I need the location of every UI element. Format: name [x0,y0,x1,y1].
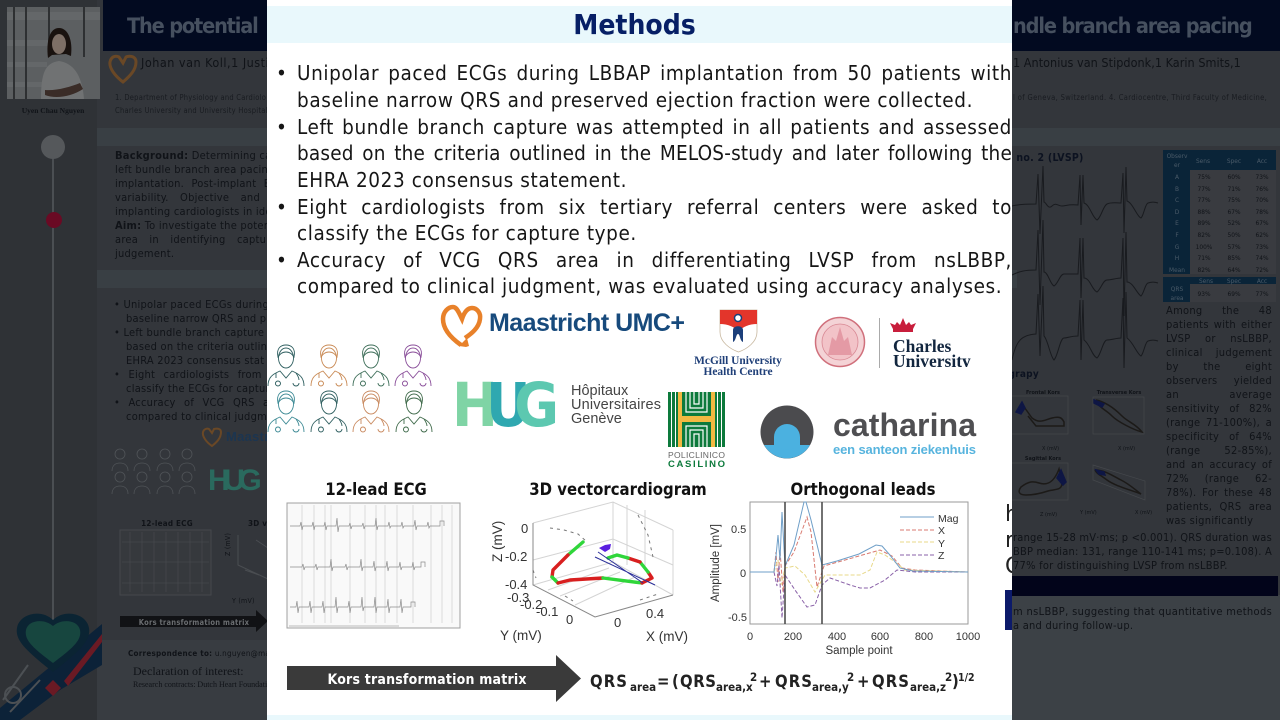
results text column: specificity of 64% [1166,430,1272,443]
formula: QRS area: area,x [716,680,753,694]
results table: 72% [1256,266,1269,274]
axis labels: -0.2 [520,597,542,612]
axis labels: 1000 [956,631,980,643]
axis labels: 0 [614,615,621,630]
results table: F [1175,231,1179,239]
logo: catharina: een santeon ziekenhuis [833,442,976,457]
logo: Policlinico Casilino: CASILINO [668,459,725,470]
results table: H [1175,254,1179,262]
results table: 70% [1256,196,1269,204]
vectorcardiography panel [1000,369,1152,518]
vector loop [552,542,652,583]
authors line: Johan van Koll,1 Justi [140,55,269,70]
vectorcardiography panel: Y (mV) [1079,510,1097,516]
formula: QRS area: 2 [750,670,757,684]
results text column: (range 52-85%), [1166,444,1272,457]
axis labels: -0.5 [728,612,747,624]
heading: Methods: Methods [573,8,696,41]
results lower lines: BBP median: 131, range 110-141 ms; p=0.108). A [1013,545,1272,558]
results text column: patients, QRS area [1166,500,1272,513]
results table: 77% [1256,290,1269,298]
dimmed logos and icons [112,429,269,497]
logo: McGill University Health Centre: Health Centre [703,366,773,378]
presenter photo [7,7,100,99]
axis labels: -0.2 [505,549,527,564]
axis labels: X (mV) [646,629,688,644]
vectorcardiography panel: grapy [1008,369,1039,380]
results text column: and an accuracy of [1166,458,1272,471]
logo: HUG: G [514,370,559,441]
dimmed methods bullets: • Unipolar paced ECGs during [114,298,269,311]
formula: QRS area: area,y [812,680,849,694]
axis labels: 0 [740,568,746,580]
background and aim text: area in identifying capture type [115,233,311,246]
axis labels: 400 [828,631,846,643]
formula: QRS area: ( [672,672,679,691]
presenter name: Uyen Chau Nguyen [22,106,85,115]
dimmed methods bullets: • Left bundle branch capture [114,326,264,339]
logo: catharina: catharina [833,407,976,443]
formula: QRS area: 1/2 [958,672,975,684]
results table: Acc [1257,157,1267,165]
bullet 3: classify the ECGs for capture type. [297,221,637,245]
axis labels: 800 [915,631,933,643]
heading: 12-lead ECG [325,480,427,499]
axis labels: -0.4 [505,577,527,592]
heading: Methods [267,6,1012,43]
bullet 1: Unipolar paced ECGs during LBBAP implantation from 50 patients with [297,61,1012,85]
results text column: by the eight [1166,360,1272,373]
vectorcardiography panel: X (mV) [1118,446,1135,452]
icon: cardiologist 3 [353,345,389,386]
background and aim text [114,149,336,260]
logo: Charles University: University [893,351,971,371]
results text column: 78%). For these 48 [1166,486,1272,499]
arrow: Kors transformation matrix: Kors transformation matrix [328,672,526,688]
axis labels: -0.3 [507,590,529,605]
formula: QRS area: QRS [680,672,716,691]
correspondence and declaration: Correspondence to: u.nguyen@maas [128,649,279,658]
logo: HUG [452,370,661,441]
axis labels [710,524,980,657]
formula: QRS area: area,z [910,680,946,694]
results table: 88% [1198,208,1211,216]
results text column: was significantly [1166,514,1253,527]
axis labels: 0 [747,631,753,643]
trace: Z [750,565,968,618]
results table: 67% [1256,219,1269,227]
results table: 57% [1228,243,1241,251]
illustrations and logos [268,304,980,702]
results table: 76% [1256,185,1269,193]
authors line: 1 Antonius van Stipdonk,1 Karin Smits,1 [1013,55,1241,70]
results table: area [1170,294,1184,302]
axis labels: -0.1 [536,604,558,619]
results table: 85% [1228,254,1241,262]
axis labels: Z (mV) [490,521,505,562]
background and aim text: judgement. [114,247,174,260]
results table: Observ [1167,152,1188,160]
results table: 78% [1256,208,1269,216]
results table: C [1175,196,1179,204]
background and aim text: implantation. Post-implant ECG [115,177,285,190]
icon: cardiologist 2 [311,345,347,386]
poster title banner: ndle branch area pacing [1013,14,1253,39]
logo: HUG: Hôpitaux [571,383,629,399]
results table: 60% [1228,173,1241,181]
results table: 77% [1198,185,1211,193]
formula: QRS area: 2 [847,670,854,684]
bullet 4: • [276,248,287,272]
results text column: sensitivity of 82% [1166,402,1272,415]
axis labels: Amplitude [mV] [710,524,722,602]
vectorcardiography panel: Transverse Kors [1097,390,1141,396]
bullet 2: EHRA 2023 consensus statement. [297,168,627,192]
dimmed methods bullets: • Accuracy of VCG QRS area [114,396,286,409]
bullet 3: • [276,195,287,219]
results table: G [1175,243,1180,251]
affiliations [115,93,1267,115]
dimmed ECG figures: 12-lead ECG [141,519,193,528]
bullet 3: Eight cardiologists from six tertiary referral centers were asked to [297,195,1012,219]
results table: 100% [1196,243,1213,251]
icon: cardiologist 8 [396,391,432,432]
background and aim text: left bundle branch area pacing [115,163,275,176]
bullet 2: • [276,115,287,139]
dimmed ECG figures: Z (mV) [224,533,232,556]
axis labels: 600 [871,631,889,643]
bullet 2: based on the criteria outlined in the MELOS-study and later following the [297,141,1012,165]
logo: catharina [760,406,976,458]
icon: cardiologist 7 [353,391,389,432]
dimmed logos and icons: HUG [208,464,262,497]
conclusion text [1013,605,1272,632]
vectorcardiography panel: X (mV) [1042,446,1059,452]
panel footer strip [267,715,1012,720]
formula: QRS area: 2 [945,670,952,684]
bullet 4: compared to clinical judgment, was evaluated using accuracy analyses. [297,274,1002,298]
results table: 50% [1228,231,1241,239]
results lower lines [1013,531,1272,572]
axis labels: 200 [784,631,802,643]
icon group: eight cardiologists [268,345,432,432]
background and aim text: Aim: To investigate the potential [115,219,287,232]
results table: QRS [1171,285,1183,293]
logo: McGill University Health Centre: McGill University [694,355,782,367]
ECG sheet [287,503,460,628]
results table: 73% [1256,243,1269,251]
formula: QRS area: ) [952,672,959,691]
results table: 62% [1256,231,1269,239]
dimmed ECG figures [120,519,281,605]
bullet 2 [276,115,1012,192]
vectorcardiography panel: Sagittal Kors [1025,456,1061,462]
results text column: Among the 48 [1166,304,1272,317]
results table: Spec [1227,277,1241,285]
dimmed methods bullets: classify the ECGs for captur [126,382,271,395]
results table: 93% [1198,290,1211,298]
results table: Sens [1199,277,1213,285]
dimmed methods bullets [114,298,286,423]
figure: 12-lead ECG [287,480,460,628]
vectorcardiography panel: Frontal Kors [1026,390,1060,396]
axis labels: 0 [566,612,573,627]
formula: QRS area: QRS [872,672,909,691]
logo: McGill University Health Centre [694,310,782,378]
results table: 71% [1228,185,1241,193]
dimmed ECG figures: Y (mV) [231,597,255,605]
arrow: Kors transformation matrix [287,655,581,702]
dimmed methods bullets: baseline narrow QRS and p [126,312,266,325]
trace: magnitude [750,502,968,572]
affiliations: Charles University and University Hospital [115,106,268,115]
legend: Mag [938,513,959,525]
results table: 74% [1256,254,1269,262]
icon: cardiologist 6 [311,391,347,432]
dimmed Kors arrow: Kors transformation matrix [139,618,250,627]
QRS boundary lines [785,502,822,624]
bullet 4 [276,248,1012,298]
panel: methods popup [267,0,1012,720]
results text column: (range 71-100%), a [1166,416,1272,429]
bullet 1: baseline narrow QRS and preserved ejection fraction were collected. [297,88,973,112]
background and aim text: Background: Determining capture [115,149,299,162]
formula: QRS area: QRS [590,672,627,691]
dimmed logos and icons: Maastr [226,429,269,444]
conference heart logo [0,614,102,720]
chart frame [750,502,968,624]
authors line [110,55,1241,82]
bullet 3 [276,195,1012,245]
clipped foreground lettering at right edge [1005,502,1012,630]
dimmed methods bullets: • Eight cardiologists from six [114,368,285,381]
axis labels [490,521,688,644]
results table: 82% [1198,266,1211,274]
ECG no. 2 panel: ECG no. 2 (LVSP) [991,152,1084,164]
results text column: LVSP or nsLBBP, [1166,332,1272,345]
results table: 82% [1198,231,1211,239]
dimmed methods bullets: EHRA 2023 consensus stat [126,354,264,367]
trace: X [750,517,968,592]
bullet 4: Accuracy of VCG QRS area in differentiating LVSP from nsLBBP, [297,248,1012,272]
conclusion text: a and during follow-up. [1013,619,1133,632]
poster title banner [103,0,1280,51]
formula: QRS area: + [759,672,771,691]
results text column: 72% (range 62- [1166,472,1272,485]
dimmed methods bullets: compared to clinical judgme [126,410,273,423]
results table: 73% [1256,173,1269,181]
axis labels: Sample point [825,645,893,657]
formula: QRS area: + [857,672,869,691]
trace: Y [750,552,968,592]
dimmed Kors arrow [120,610,268,632]
results table: D [1175,208,1180,216]
logo: Charles University: Charles [893,336,952,356]
results table: 67% [1228,208,1241,216]
formula: QRS area: QRS [775,672,812,691]
results table: 69% [1228,290,1241,298]
formula: QRS area: = [657,672,669,691]
results table: Mean [1169,266,1185,274]
logo: Maastricht UMC+ [443,307,685,347]
affiliations: 1. Department of Physiology and Cardiolo [115,93,266,102]
results text column: clinical judgement [1166,346,1272,359]
formula: QRS area [590,670,975,694]
bullet 2: Left bundle branch capture was attempted in all patients and assessed [297,115,1012,139]
results text column: observers yielded [1166,374,1272,387]
results table: er [1174,161,1181,169]
results table: A [1175,173,1179,181]
vectorcardiography panel: Z (mV) [1040,512,1057,518]
figure: 3D vectorcardiogram [490,480,707,644]
heading: Orthogonal leads [791,480,936,499]
legend [900,513,959,562]
axis labels: Y (mV) [500,628,542,643]
results table: Acc [1257,277,1267,285]
poster title banner: The potential [127,14,259,39]
icon: cardiologist 5 [268,391,304,432]
logo: Policlinico Casilino [668,392,725,470]
results table: 89% [1198,219,1211,227]
correspondence and declaration: Declaration of interest: [133,664,244,678]
results lower lines: range 15-28 mV·ms; p <0.001). QRS duration was [1013,531,1272,544]
legend: X [938,525,945,537]
vectorcardiography panel: X (mV) [1135,510,1152,516]
results text column: an average [1166,388,1272,401]
bullet list [276,61,1012,298]
results table: Spec [1227,157,1241,165]
background and aim text: variability. Objective and reproducible [115,191,336,204]
icon: cardiologist 4 [395,345,431,386]
background and aim text: implanting cardiologists in identifying [115,205,311,218]
dimmed ECG figures: 3D vect [248,519,281,528]
results table: Sens [1196,157,1210,165]
results table: B [1175,185,1179,193]
legend: Y [938,538,945,550]
logo: HUG: Universitaires [571,397,661,413]
axis labels: 0 [521,521,528,536]
results table: 71% [1198,254,1211,262]
logo: Maastricht UMC+: Maastricht UMC+ [489,309,685,337]
correspondence and declaration [128,649,279,689]
legend: Z [938,550,945,562]
results text column: patients with either [1166,318,1272,331]
results table: 75% [1228,196,1241,204]
logo: HUG: Genève [571,411,622,427]
ECG no. 2 panel [991,152,1158,368]
icon: cardiologist 1 [268,345,304,386]
logo: HUG: H [452,370,498,441]
bullet 1: • [276,61,287,85]
logo: HUG: U [486,370,531,441]
logo: Charles University [816,318,985,372]
heading: 3D vectorcardiogram [529,480,707,499]
results table: E [1175,219,1179,227]
logo: Policlinico Casilino: POLICLINICO [668,450,725,460]
bullet 1 [276,61,1012,112]
results table: 64% [1228,266,1241,274]
results table [1163,150,1276,302]
figure: orthogonal leads [710,480,980,657]
results table: 77% [1198,196,1211,204]
formula: QRS area: area [630,680,656,694]
conclusion heading bar [1012,576,1278,596]
timeline [41,135,65,620]
results text column [1166,304,1272,527]
conclusion text: m nsLBBP, suggesting that quantitative methods [1013,605,1272,618]
correspondence and declaration: Research contracts: Dutch Heart Foundation [133,680,275,689]
results lower lines: 77% for distinguishing LVSP from nsLBBP. [1013,559,1228,572]
affiliations: l of Geneva, Switzerland. 4. Cardiocentre, Third Faculty of Medicine, [1013,93,1267,102]
axis labels: 0.4 [646,606,664,621]
results table: 52% [1228,219,1241,227]
plot box [533,502,673,605]
results table: 75% [1198,173,1211,181]
dimmed methods bullets: based on the criteria outlined [126,340,280,353]
axis labels: 0.5 [731,524,746,536]
